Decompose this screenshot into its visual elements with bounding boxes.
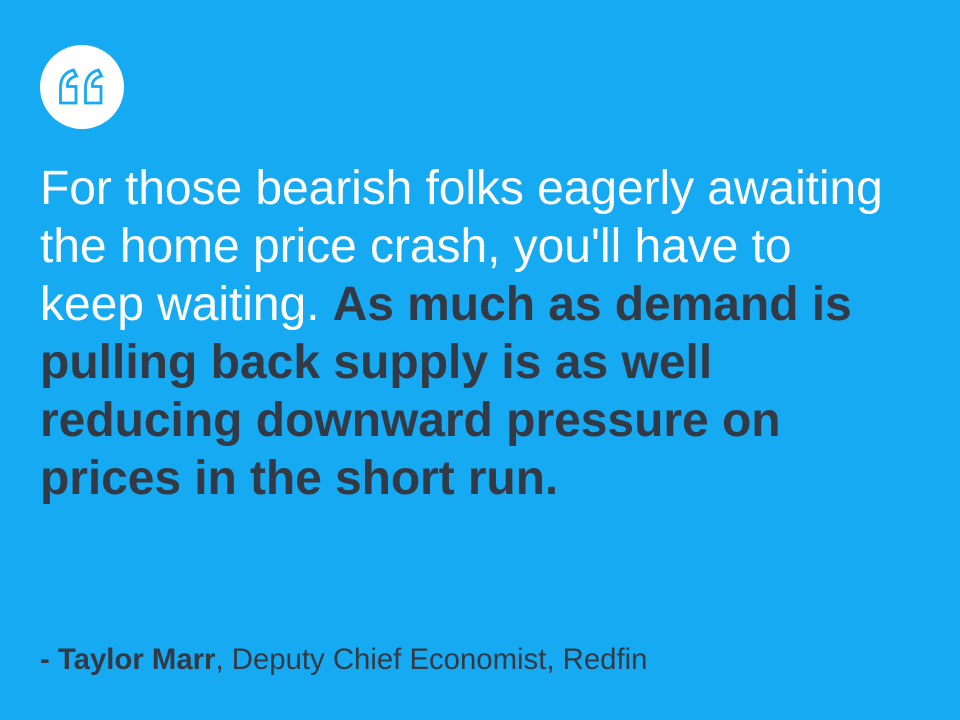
- quote text: the home price crash, you'll have to: [40, 220, 792, 273]
- attribution: - Taylor Marr, Deputy Chief Economist, Redfin: [40, 643, 647, 676]
- quote text: pulling back supply is as well: [40, 336, 712, 389]
- quote text: [40, 162, 883, 505]
- icon: quotation mark badge: [40, 45, 124, 129]
- quote text: keep waiting. As much as demand is: [40, 278, 852, 331]
- quote text: reducing downward pressure on: [40, 394, 781, 447]
- quote text: For those bearish folks eagerly awaiting: [40, 162, 883, 215]
- quote text: prices in the short run.: [40, 452, 558, 505]
